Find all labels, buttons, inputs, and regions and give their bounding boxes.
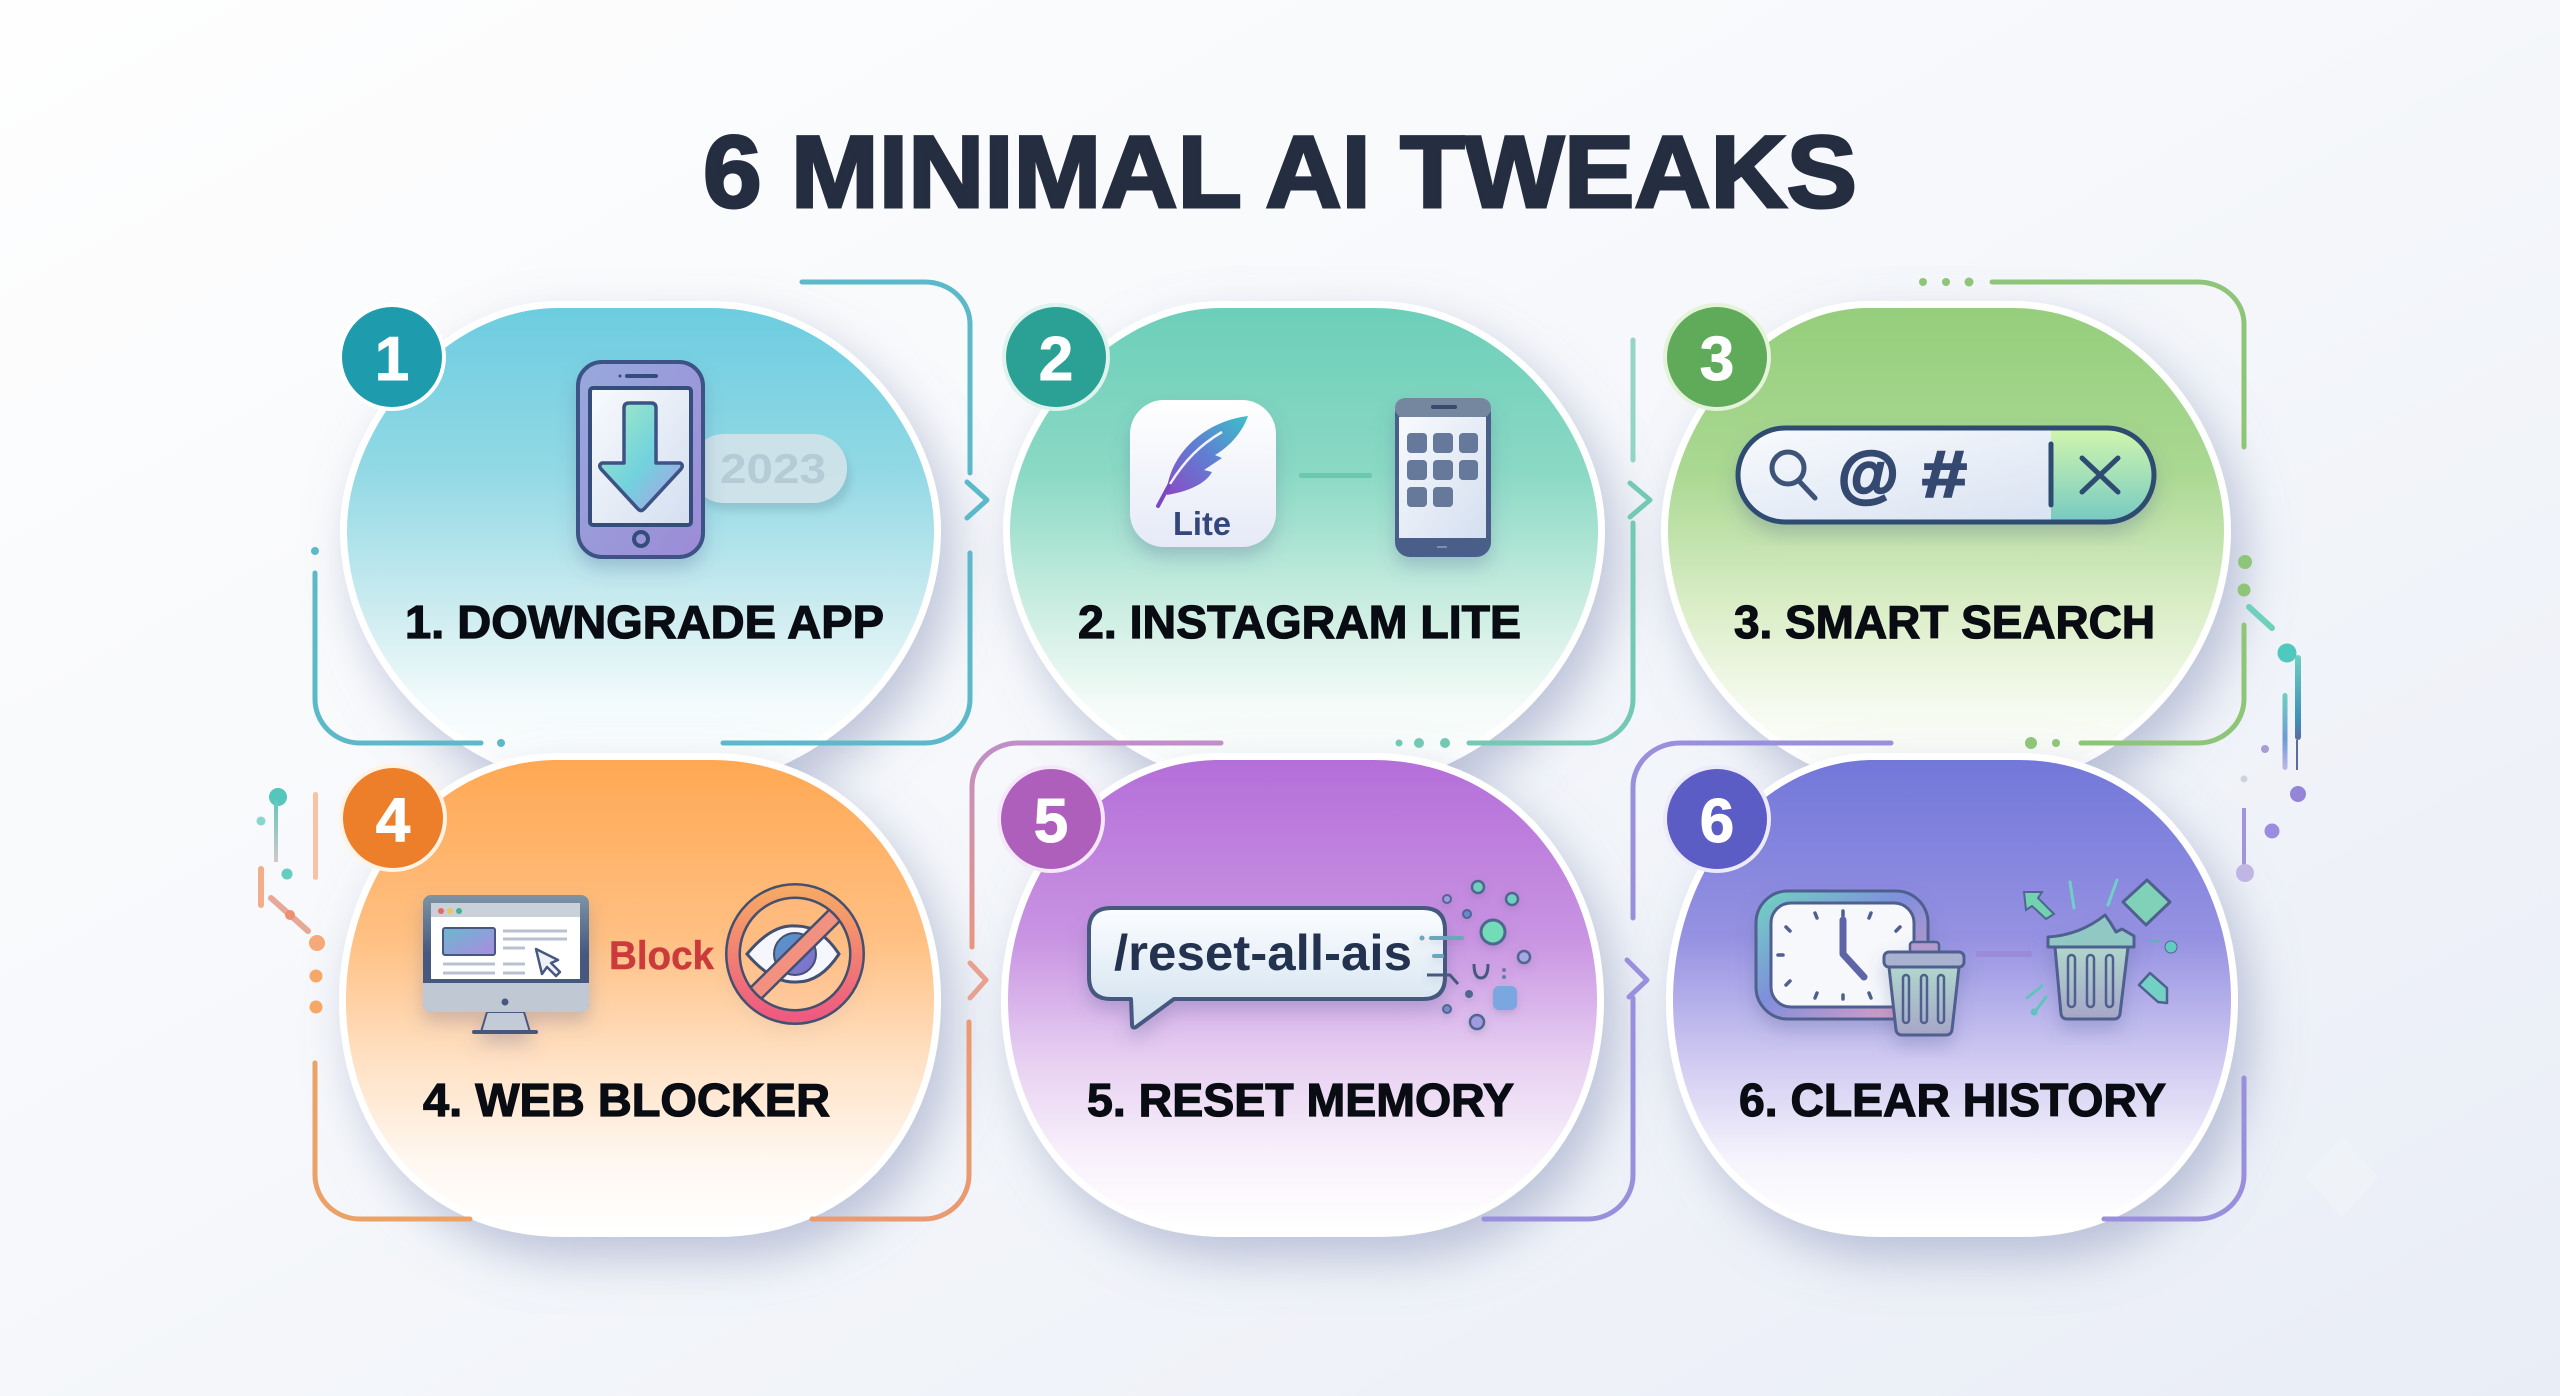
connector frame: card 2 green-teal bbox=[1396, 340, 1650, 748]
badge 1 bbox=[338, 303, 446, 411]
icon: search bar bbox=[1738, 428, 2154, 522]
label: 2. INSTAGRAM LITE bbox=[1078, 596, 1521, 648]
connector frame: card 1 teal bbox=[311, 282, 987, 747]
badge 3: 3 bbox=[1700, 325, 1734, 394]
icon: lite app tile: Lite bbox=[1173, 505, 1231, 542]
card blob bbox=[1010, 308, 1598, 775]
icon: search bar: @ bbox=[1838, 440, 1898, 509]
label: 3. SMART SEARCH bbox=[1734, 596, 2155, 648]
icon: burst trash can bbox=[2048, 915, 2134, 1019]
badge 6 bbox=[1663, 765, 1771, 873]
card blob bbox=[1673, 760, 2231, 1230]
icon: clock bbox=[1756, 891, 1928, 1019]
card blob bbox=[1668, 308, 2224, 775]
2023 pill: 2023 bbox=[720, 445, 826, 492]
icon: trash can by clock bbox=[1884, 942, 1964, 1035]
icon: flying debris bbox=[2024, 880, 2177, 1016]
badge 2: 2 bbox=[1039, 325, 1073, 394]
2023 pill bbox=[690, 434, 847, 503]
title: 6 MINIMAL AI TWEAKS bbox=[703, 115, 1857, 229]
panel: 3 smart search bbox=[1663, 303, 2224, 775]
connector frame: card 3 green bbox=[1919, 278, 2252, 749]
badge 5 bbox=[997, 765, 1105, 873]
badge 1: 1 bbox=[375, 325, 409, 394]
decoration: left side particles bbox=[256, 788, 325, 1014]
decoration: right side particles bbox=[2236, 607, 2306, 882]
badge 4: 4 bbox=[376, 786, 411, 855]
icon: browser monitor bbox=[423, 895, 589, 1034]
icon: crossed eye bbox=[727, 885, 863, 1023]
badge 4 bbox=[339, 764, 447, 872]
dash connector bbox=[1976, 951, 2032, 957]
faint diamond sparkle bbox=[2306, 1136, 2378, 1218]
card blob bbox=[346, 760, 934, 1230]
icon: lite app tile bbox=[1130, 400, 1276, 547]
icon: command speech bubble bbox=[1089, 908, 1445, 1028]
label: 4. WEB BLOCKER bbox=[423, 1074, 830, 1126]
connector frame: card 5 purple bbox=[1484, 743, 2244, 1219]
panel: 1 downgrade app bbox=[338, 303, 934, 775]
badge 6: 6 bbox=[1700, 787, 1734, 856]
card blob bbox=[1008, 760, 1597, 1230]
icon: dissolving particles bbox=[1420, 881, 1530, 1029]
panel: 6 clear history bbox=[1663, 760, 2231, 1230]
badge 5: 5 bbox=[1034, 787, 1068, 856]
panel: 5 reset memory bbox=[997, 760, 1597, 1230]
icon: command speech bubble: /reset-all-ais bbox=[1114, 925, 1412, 981]
icon: search bar: # bbox=[1922, 437, 1967, 511]
icon: phone with app grid bbox=[1395, 398, 1491, 557]
badge 3 bbox=[1663, 303, 1771, 411]
panel: 2 instagram lite bbox=[1002, 303, 1598, 775]
connector frame: card 4 orange bbox=[315, 1022, 969, 1219]
panel: 4 web blocker bbox=[339, 760, 934, 1230]
card blob bbox=[347, 308, 934, 775]
label: 5. RESET MEMORY bbox=[1087, 1074, 1514, 1126]
label: 1. DOWNGRADE APP bbox=[405, 596, 884, 648]
badge 2 bbox=[1002, 303, 1110, 411]
connector frame: card 5 top into arrow bbox=[970, 743, 1221, 998]
label: 6. CLEAR HISTORY bbox=[1739, 1074, 2166, 1126]
dash connector bbox=[1299, 473, 1372, 478]
icon: phone with download arrow bbox=[578, 362, 703, 557]
block text: Block bbox=[609, 934, 715, 978]
